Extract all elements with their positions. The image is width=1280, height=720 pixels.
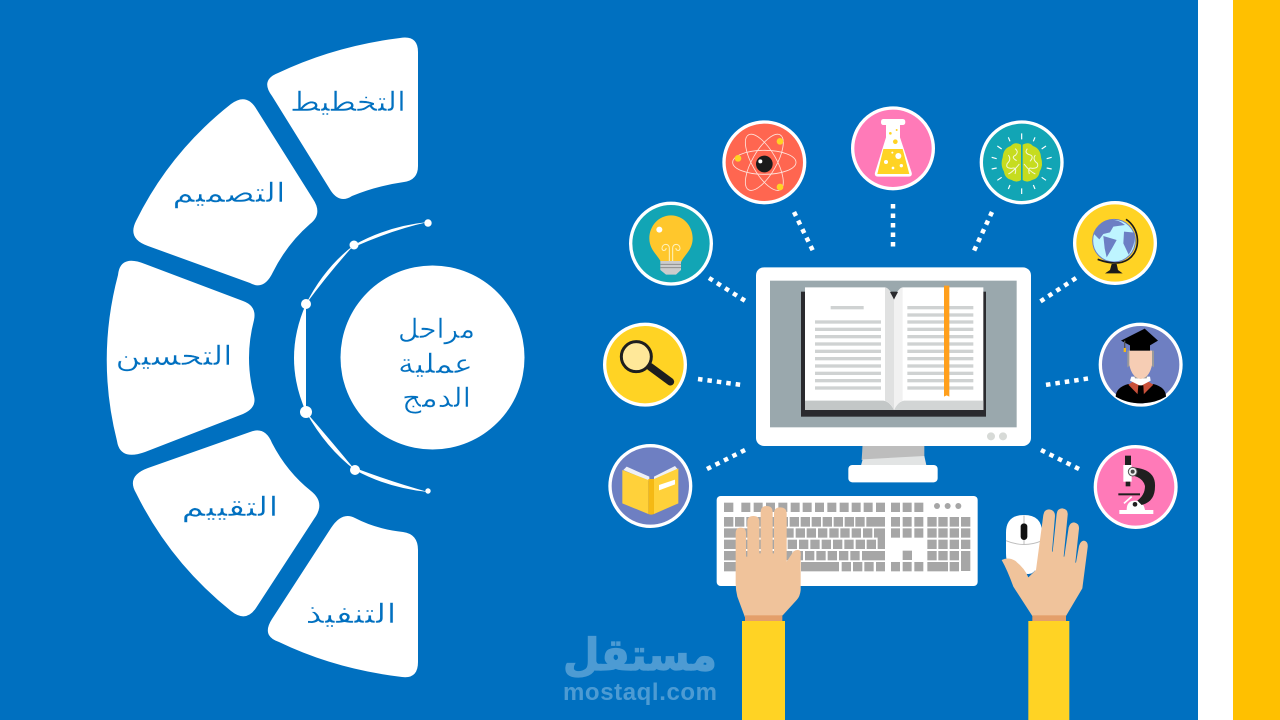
yellow side strip — [1233, 0, 1280, 720]
watermark logo: mostaql.com — [563, 679, 717, 706]
panel: planning segment — [267, 38, 418, 199]
center circle with title: الدمج — [402, 383, 471, 414]
center circle with title: عملية — [398, 349, 473, 380]
dotted connectors — [698, 204, 1088, 470]
left sleeve — [742, 621, 785, 720]
mouse — [1006, 515, 1042, 576]
monitor stand — [848, 443, 938, 482]
left wrist — [745, 615, 782, 621]
panel: evaluation segment — [133, 430, 319, 616]
left hand — [736, 506, 801, 617]
watermark logo: مستقل — [563, 630, 717, 681]
open book on screen — [801, 286, 986, 417]
icon: brain — [981, 122, 1062, 203]
monitor screen — [770, 281, 1017, 427]
keyboard and hands — [717, 496, 1088, 720]
monitor frame — [756, 267, 1031, 446]
white side strip — [1198, 0, 1233, 720]
panel: improvement segment: التحسين — [116, 341, 232, 372]
keyboard — [717, 496, 978, 586]
watermark logo — [563, 630, 717, 706]
icon: graduate — [1100, 324, 1181, 405]
panel: implementation segment: التنفيذ — [306, 599, 396, 630]
center circle with title — [340, 266, 524, 450]
icon: magnifier — [605, 324, 685, 405]
center circle with title: مراحل — [398, 314, 475, 345]
connector arc with nodes — [294, 219, 432, 494]
panel: evaluation segment: التقييم — [182, 492, 278, 523]
panel: planning segment: التخطيط — [290, 87, 406, 118]
monitor — [756, 267, 1031, 482]
right wrist — [1032, 615, 1066, 621]
right sleeve — [1028, 621, 1069, 720]
icon: globe — [1075, 203, 1155, 283]
icon: light bulb — [631, 203, 711, 284]
right hand — [1002, 508, 1088, 616]
panel: design segment — [133, 99, 317, 285]
panel: design segment: التصميم — [172, 178, 286, 209]
icon: flask — [853, 108, 933, 189]
icon: atom — [724, 122, 805, 203]
icon: microscope — [1095, 447, 1176, 527]
monitor buttons — [987, 432, 1007, 440]
panel: implementation segment — [268, 516, 418, 677]
icon: yellow book — [610, 446, 691, 526]
panel: improvement segment — [107, 261, 255, 455]
